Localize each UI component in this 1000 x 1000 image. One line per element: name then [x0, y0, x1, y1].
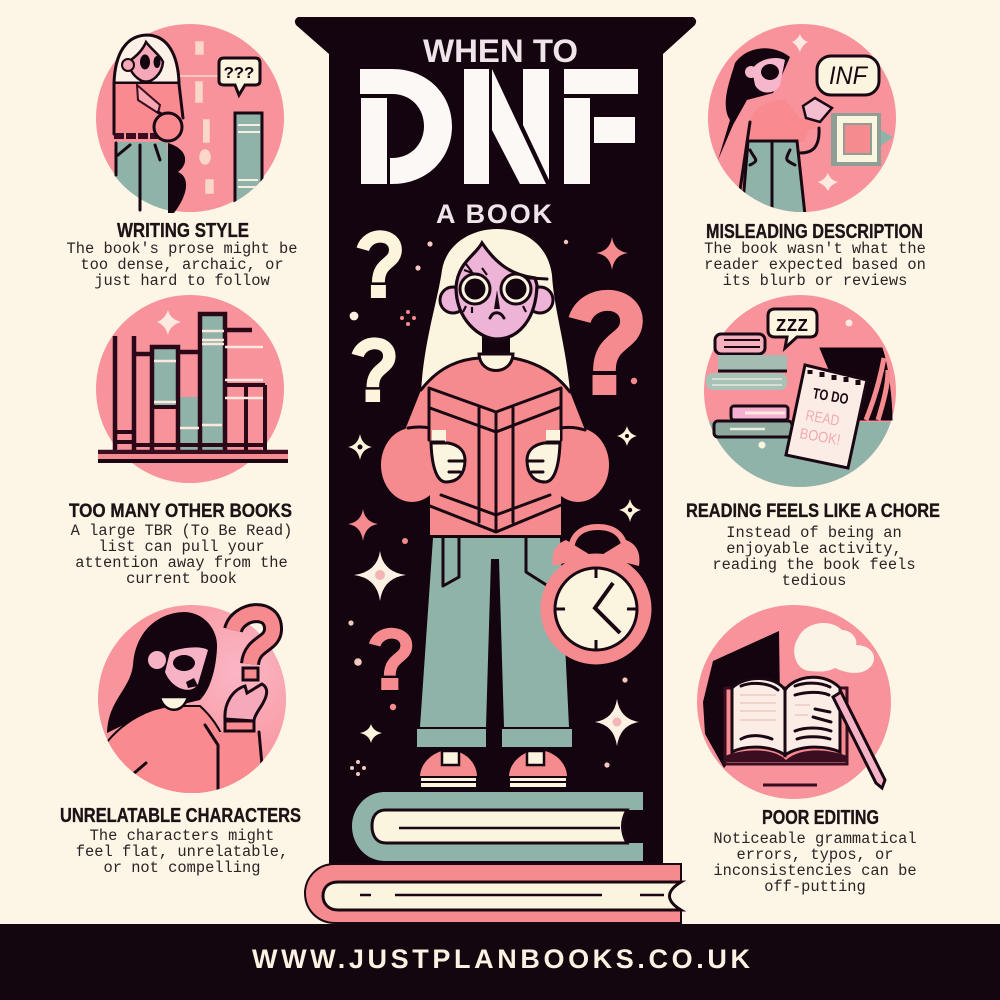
title line: a book: A BOOK [436, 199, 552, 229]
speech bubble zzz [768, 309, 817, 348]
description: The characters might [90, 827, 274, 845]
notepad: BOOK! [798, 425, 842, 449]
book stack [706, 334, 792, 437]
face [456, 243, 537, 339]
collar [479, 354, 513, 370]
speech bubble zzz: ZZZ [776, 317, 808, 337]
figure [718, 48, 820, 215]
hand [803, 98, 832, 122]
description: or not compelling [103, 859, 261, 877]
central pillar [295, 17, 696, 866]
description: current book [126, 570, 237, 588]
circle [708, 24, 896, 212]
description: its blurb or reviews [723, 272, 907, 290]
sparkle [157, 310, 181, 335]
main character: girl reading [381, 229, 609, 788]
panel: unrelatable characters [60, 605, 301, 877]
description: inconsistencies can be [713, 862, 917, 880]
pen [833, 692, 885, 788]
teal book under feet [352, 792, 643, 861]
circle [98, 605, 286, 793]
left shoe [420, 750, 477, 777]
circle [704, 295, 896, 487]
description: errors, typos, or [736, 846, 894, 864]
question mark cream 1 [363, 236, 395, 298]
title line: when to: WHEN TO [423, 33, 578, 69]
question mark [233, 613, 273, 680]
small dots [348, 240, 637, 776]
panel: writing style [67, 24, 297, 290]
notepad: TO DO [811, 385, 850, 408]
cloud [794, 623, 874, 673]
sparkles [596, 237, 628, 270]
trouser cuffs [417, 729, 486, 747]
description: just hard to follow [94, 272, 271, 290]
sparkles [792, 34, 838, 191]
hair [421, 229, 570, 420]
title: DNF block letters [360, 69, 638, 184]
speech bubble [219, 58, 260, 95]
description: off-putting [764, 878, 866, 896]
description: A large TBR (To Be Read) [71, 522, 292, 540]
description: list can pull your [98, 538, 265, 556]
sweater [405, 358, 585, 535]
question mark cream 2 [358, 343, 389, 402]
description: Instead of being an [726, 524, 902, 542]
heading: READING FEELS LIKE A CHORE [686, 500, 940, 522]
hand [225, 684, 267, 731]
description: feel flat, unrelatable, [76, 843, 288, 861]
glasses [460, 274, 490, 304]
brow and lashes [463, 264, 526, 313]
heading: WRITING STYLE [117, 219, 249, 242]
description: The book wasn't what the [704, 240, 926, 258]
nose and mouth [494, 290, 500, 309]
figure [114, 35, 186, 214]
description: attention away from the [75, 554, 288, 572]
description: reader expected based on [704, 256, 926, 274]
shelf of books [98, 314, 288, 461]
pink book at base [305, 864, 681, 923]
description: The book's prose might be [67, 240, 297, 258]
black board [820, 348, 892, 420]
trousers [420, 538, 569, 727]
description: Noticeable grammatical [713, 830, 917, 848]
hands [431, 443, 465, 482]
speech bubble [817, 56, 879, 95]
description: enjoyable activity, [726, 540, 902, 558]
description: reading the book feels [712, 556, 916, 574]
decorative question marks and sparkles [348, 236, 641, 776]
question mark small pink [375, 633, 406, 690]
icon: alarm clock [540, 527, 652, 664]
open book [725, 677, 847, 764]
heading: MISLEADING DESCRIPTION [706, 221, 923, 243]
right shoe [509, 750, 567, 777]
notepad: READ [804, 407, 841, 430]
panel: poor editing [697, 605, 917, 896]
panel: misleading description [704, 24, 926, 290]
underline [763, 784, 817, 786]
heading: UNRELATABLE CHARACTERS [60, 805, 301, 827]
faint letters [180, 42, 220, 193]
description: tedious [782, 572, 846, 590]
title [360, 33, 638, 229]
circle [697, 605, 891, 799]
heading: POOR EDITING [762, 807, 879, 829]
dots [846, 320, 852, 326]
question mark large pink [580, 300, 631, 395]
speech bubble: ??? [224, 65, 254, 84]
speech bubble: INF [829, 62, 869, 90]
circle [96, 24, 284, 212]
circle [96, 295, 284, 483]
panel: too many other books [69, 295, 292, 588]
notepad [786, 365, 867, 468]
footer bar [0, 924, 1000, 1000]
neck [482, 335, 510, 355]
black silhouette [703, 631, 780, 768]
heading: TOO MANY OTHER BOOKS [69, 500, 292, 522]
panel: reading feels like a chore [686, 295, 940, 590]
website url: WWW.JUSTPLANBOOKS.CO.UK [252, 944, 750, 974]
description: too dense, archaic, or [80, 256, 284, 274]
book [831, 113, 893, 166]
open book [430, 388, 561, 532]
ears [440, 287, 466, 313]
sleeves [381, 428, 443, 502]
figure [100, 612, 262, 800]
standing book [235, 113, 262, 213]
